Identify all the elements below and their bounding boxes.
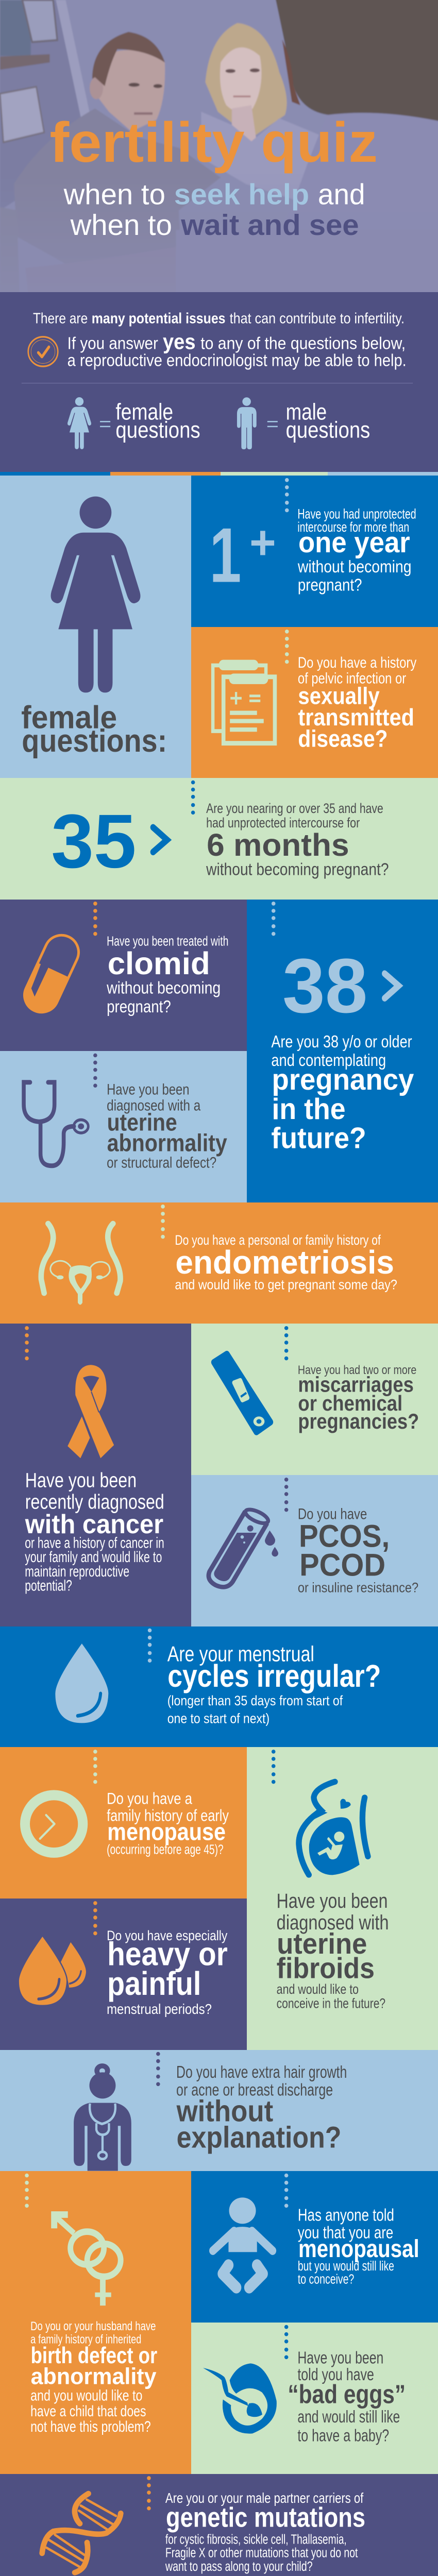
legend: female: female (115, 399, 173, 425)
question text: disease? (298, 726, 388, 752)
question text (107, 1080, 227, 1171)
question text: Do you have a history (298, 654, 417, 671)
question text: uterine (107, 1109, 177, 1136)
subtitle: when to (70, 209, 172, 242)
instruction text: If you answer (68, 333, 158, 353)
question text: or structural defect? (107, 1154, 216, 1171)
question text: fibroids (277, 1953, 375, 1985)
icon: pill capsule (19, 929, 84, 1018)
question text (30, 2319, 157, 2435)
number: 1+ (210, 512, 276, 599)
legend: female (68, 397, 200, 449)
subtitle: and (318, 179, 365, 211)
subtitle: wait and see (180, 209, 359, 242)
icon: clipboards (213, 660, 275, 743)
panel: age 38 question (247, 900, 438, 1202)
question text: without becoming (106, 978, 221, 997)
question text: Are your menstrual (167, 1642, 314, 1666)
question text: and would like to get pregnant some day? (175, 1278, 397, 1293)
instruction text: a reproductive endocrinologist may be able to help. (68, 350, 407, 370)
question text (107, 1928, 228, 2017)
question text (298, 654, 417, 752)
icon: check mark circle (28, 337, 58, 366)
number: 35: 35 (51, 799, 137, 884)
man (14, 108, 221, 268)
question text (175, 1233, 397, 1293)
question text: Have you been (25, 1469, 137, 1492)
question text: potential? (25, 1577, 72, 1594)
question text: abnormality (31, 2363, 157, 2389)
question text: Do you or your husband have (30, 2319, 156, 2333)
icon: interlocked gender symbols (51, 2211, 121, 2306)
question text: Fragile X or other mutations that you do not (165, 2546, 358, 2561)
question text: or chemical (298, 1392, 402, 1416)
heading: female questions (21, 700, 167, 759)
panel: one year question (191, 476, 438, 627)
question text: explanation? (177, 2121, 341, 2154)
panel: birth defect question (0, 2171, 191, 2474)
question text: one to start of next) (167, 1711, 269, 1726)
question text: or have a history of cancer in (25, 1534, 164, 1551)
panel: uterine abnormality question (0, 1051, 247, 1202)
question text: Do you have (298, 1505, 367, 1522)
icon: test tube (209, 1507, 278, 1587)
question text (277, 1889, 389, 2011)
legend: male (237, 397, 370, 449)
panel: hero photo header (0, 0, 438, 296)
panel: PCOS question (191, 1475, 438, 1626)
icon: awareness ribbon (68, 1365, 114, 1458)
question text: told you have (297, 2365, 374, 2384)
question text: Do you have especially (107, 1928, 228, 1943)
icon: stethoscope (24, 1082, 88, 1166)
question text: miscarriages (298, 1373, 414, 1397)
back of head (275, 0, 438, 122)
question text: of pelvic infection or (298, 670, 406, 687)
legend: female: questions (115, 417, 200, 443)
question text (176, 2062, 347, 2154)
icon: drop (55, 1643, 108, 1723)
panel: uterine fibroids question (247, 1747, 438, 2050)
question text (106, 935, 228, 1016)
question text: Have you had two or more (298, 1363, 416, 1377)
question text: pregnant? (107, 997, 171, 1016)
number: 38: 38 (282, 943, 367, 1029)
question text: had unprotected intercourse for (206, 816, 360, 831)
question text: you that you are (298, 2223, 393, 2242)
question text: birth defect or (31, 2342, 157, 2368)
question text: diagnosed with (277, 1911, 389, 1934)
icon: clock (20, 1790, 88, 1858)
icon: uterus and hips (41, 1224, 121, 1304)
question text: pregnancies? (298, 1410, 419, 1434)
question text (298, 1505, 418, 1596)
question text: Have you been (107, 1080, 190, 1098)
panel: heavy periods question (0, 1899, 247, 2050)
question text: Do you have extra hair growth (176, 2062, 347, 2082)
question text: to have a baby? (297, 2426, 389, 2445)
question text: Have you been (297, 2348, 383, 2367)
panel: early menopause question (0, 1747, 247, 1899)
heading: female questions: female (21, 700, 117, 735)
question text: for cystic fibrosis, sickle cell, Thallasemia, (165, 2533, 347, 2547)
icon: pregnancy test (214, 1354, 271, 1432)
panel: miscarriages question (191, 1324, 438, 1475)
question text: want to pass along to your child? (165, 2560, 313, 2574)
intro sentence: There are (33, 310, 88, 327)
question text: menstrual periods? (107, 2001, 212, 2017)
question text: Are you nearing or over 35 and have (206, 801, 383, 816)
woman (205, 23, 287, 138)
question text: heavy or (107, 1935, 228, 1972)
question text: and would still like (297, 2407, 400, 2427)
subtitle (63, 179, 365, 242)
icon: baby (213, 2197, 273, 2287)
question text: but you would still like (298, 2259, 394, 2274)
question text: 6 months (207, 828, 349, 863)
question text: in the (272, 1093, 346, 1126)
question text: Have you had unprotected (297, 507, 416, 522)
question text (288, 2348, 406, 2445)
question text: and would like to (277, 1982, 359, 1997)
icon: doctor (74, 2063, 131, 2171)
panel: genetic mutations question (0, 2474, 438, 2576)
question text: intercourse for more than (297, 520, 409, 535)
panel: cancer question (0, 1324, 191, 1626)
panel: endometriosis question (0, 1202, 438, 1324)
table and arm (0, 208, 18, 256)
question text: painful (107, 1965, 201, 2002)
question text (298, 2205, 419, 2287)
heading: female questions: questions: (22, 723, 167, 759)
question text (297, 507, 416, 595)
panel: intro (0, 292, 438, 472)
question text: family history of early (107, 1806, 229, 1825)
question text: Are you or your male partner carriers of (165, 2489, 364, 2506)
panel: clomid question (0, 900, 247, 1051)
instruction text: yes (163, 330, 195, 354)
question text: Do you have a (107, 1789, 192, 1808)
title: fertility quiz: fertility quiz (49, 111, 378, 174)
number: 1+: + (249, 516, 276, 569)
question text: Have you been (277, 1889, 388, 1912)
question text: (longer than 35 days from start of (167, 1693, 343, 1708)
intro sentence: that can contribute to infertility. (230, 310, 405, 327)
question text: uterine (277, 1928, 367, 1960)
question text: (occurring before age 45)? (107, 1843, 224, 1857)
number: 1+: 1 (210, 512, 241, 599)
question text: and contemplating (271, 1050, 386, 1070)
question text (298, 1363, 419, 1434)
panel: extra hair growth question (0, 2050, 438, 2171)
icon: egg and sperm (203, 2363, 277, 2434)
subtitle: seek help (174, 179, 309, 211)
question text: “bad eggs” (288, 2380, 406, 2409)
icon: female figure (51, 497, 140, 692)
question text: with cancer (25, 1509, 163, 1539)
question text: endometriosis (175, 1244, 394, 1281)
panel: sexually transmitted disease question (191, 627, 438, 778)
question text (167, 1642, 381, 1726)
panel: irregular cycles question (0, 1626, 438, 1747)
question text: pregnancy (272, 1063, 414, 1096)
instruction text: to any of the questions below, (200, 333, 406, 353)
question text: have a child that does (30, 2402, 146, 2420)
question text: transmitted (298, 704, 414, 731)
question text: future? (271, 1122, 366, 1155)
question text: to conceive? (298, 2273, 354, 2287)
question text: Are you 38 y/o or older (271, 1032, 412, 1052)
intro sentence (33, 310, 405, 327)
question text: clomid (108, 946, 210, 981)
question text: your family and would like to (25, 1548, 162, 1565)
icon: chevron (153, 827, 167, 852)
question text: recently diagnosed (25, 1490, 164, 1513)
question text: genetic mutations (166, 2502, 365, 2533)
question text (206, 801, 389, 879)
icon: chevron (384, 974, 399, 998)
icon: DNA helix (42, 2494, 121, 2572)
panel: bad eggs question (191, 2323, 438, 2474)
question text: abnormality (107, 1130, 227, 1157)
legend: male: male (286, 399, 327, 425)
panel: age 35 question (0, 778, 438, 900)
panel: menopausal question (191, 2171, 438, 2323)
question text (271, 1032, 414, 1155)
panel: female questions heading (0, 476, 191, 778)
title: fertility quiz (49, 111, 378, 242)
subtitle: when to (63, 179, 165, 211)
question text: conceive in the future? (277, 1996, 385, 2011)
legend: male: questions (286, 417, 370, 443)
question text: menopausal (298, 2234, 419, 2263)
instruction text (68, 330, 407, 370)
question text: one year (298, 527, 410, 559)
intro sentence: many potential issues (92, 310, 225, 327)
question text: or insuline resistance? (298, 1581, 418, 1596)
question text (165, 2489, 365, 2574)
question text: sexually (298, 683, 380, 710)
question text: cycles irregular? (167, 1659, 381, 1694)
icon: pregnant belly with fetus (299, 1782, 368, 1875)
question text: menopause (107, 1818, 226, 1845)
question text: PCOS, (299, 1519, 390, 1554)
photo: couple at consultation (0, 0, 438, 296)
question text: diagnosed with a (107, 1097, 201, 1114)
question text (107, 1789, 229, 1857)
question text: without becoming pregnant? (206, 859, 389, 879)
question text: Have you been treated with (107, 935, 228, 949)
question text: a family history of inherited (30, 2332, 141, 2346)
question text: pregnant? (298, 575, 362, 595)
question text: Has anyone told (298, 2205, 394, 2225)
question text: Do you have a personal or family history of (175, 1233, 381, 1248)
question text: not have this problem? (30, 2418, 151, 2435)
question text: maintain reproductive (25, 1563, 129, 1580)
question text: PCOD (299, 1548, 385, 1583)
question text: without (176, 2094, 273, 2128)
question text: and you would like to (30, 2387, 142, 2404)
question text: or acne or breast discharge (176, 2080, 333, 2099)
icon: two drops (19, 1937, 86, 2005)
question text (25, 1469, 164, 1594)
question text: without becoming (297, 557, 412, 577)
